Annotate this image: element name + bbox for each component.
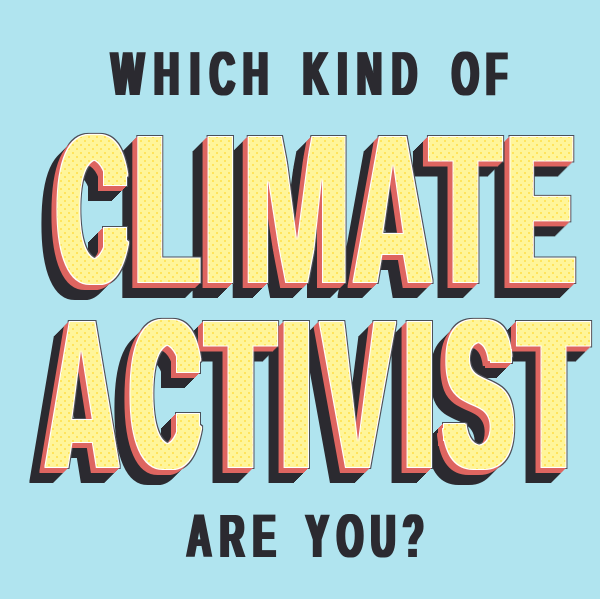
- title word: climate: E: [508, 91, 574, 327]
- poster: [29, 52, 592, 558]
- title word: activist: A: [47, 276, 117, 512]
- title word: activist: [29, 318, 592, 485]
- title word: activist: I: [404, 278, 434, 512]
- heading: are you?: ARE YOU?: [187, 502, 423, 571]
- title word: climate: C: [58, 91, 127, 327]
- title word: climate: L: [135, 93, 199, 328]
- title word: activist: T: [207, 277, 274, 512]
- title word: climate: M: [244, 91, 349, 327]
- title word: activist: V: [323, 278, 392, 513]
- title word: activist: T: [520, 277, 587, 512]
- heading: which kind of: WHICH KIND OF: [111, 38, 507, 109]
- title word: climate: I: [205, 93, 235, 327]
- title word: climate: A: [355, 92, 430, 328]
- title word: climate: T: [432, 92, 499, 327]
- title word: activist: I: [281, 278, 311, 512]
- title word: activist: S: [444, 278, 513, 513]
- title word: climate: [41, 132, 576, 300]
- title word: activist: C: [130, 276, 200, 512]
